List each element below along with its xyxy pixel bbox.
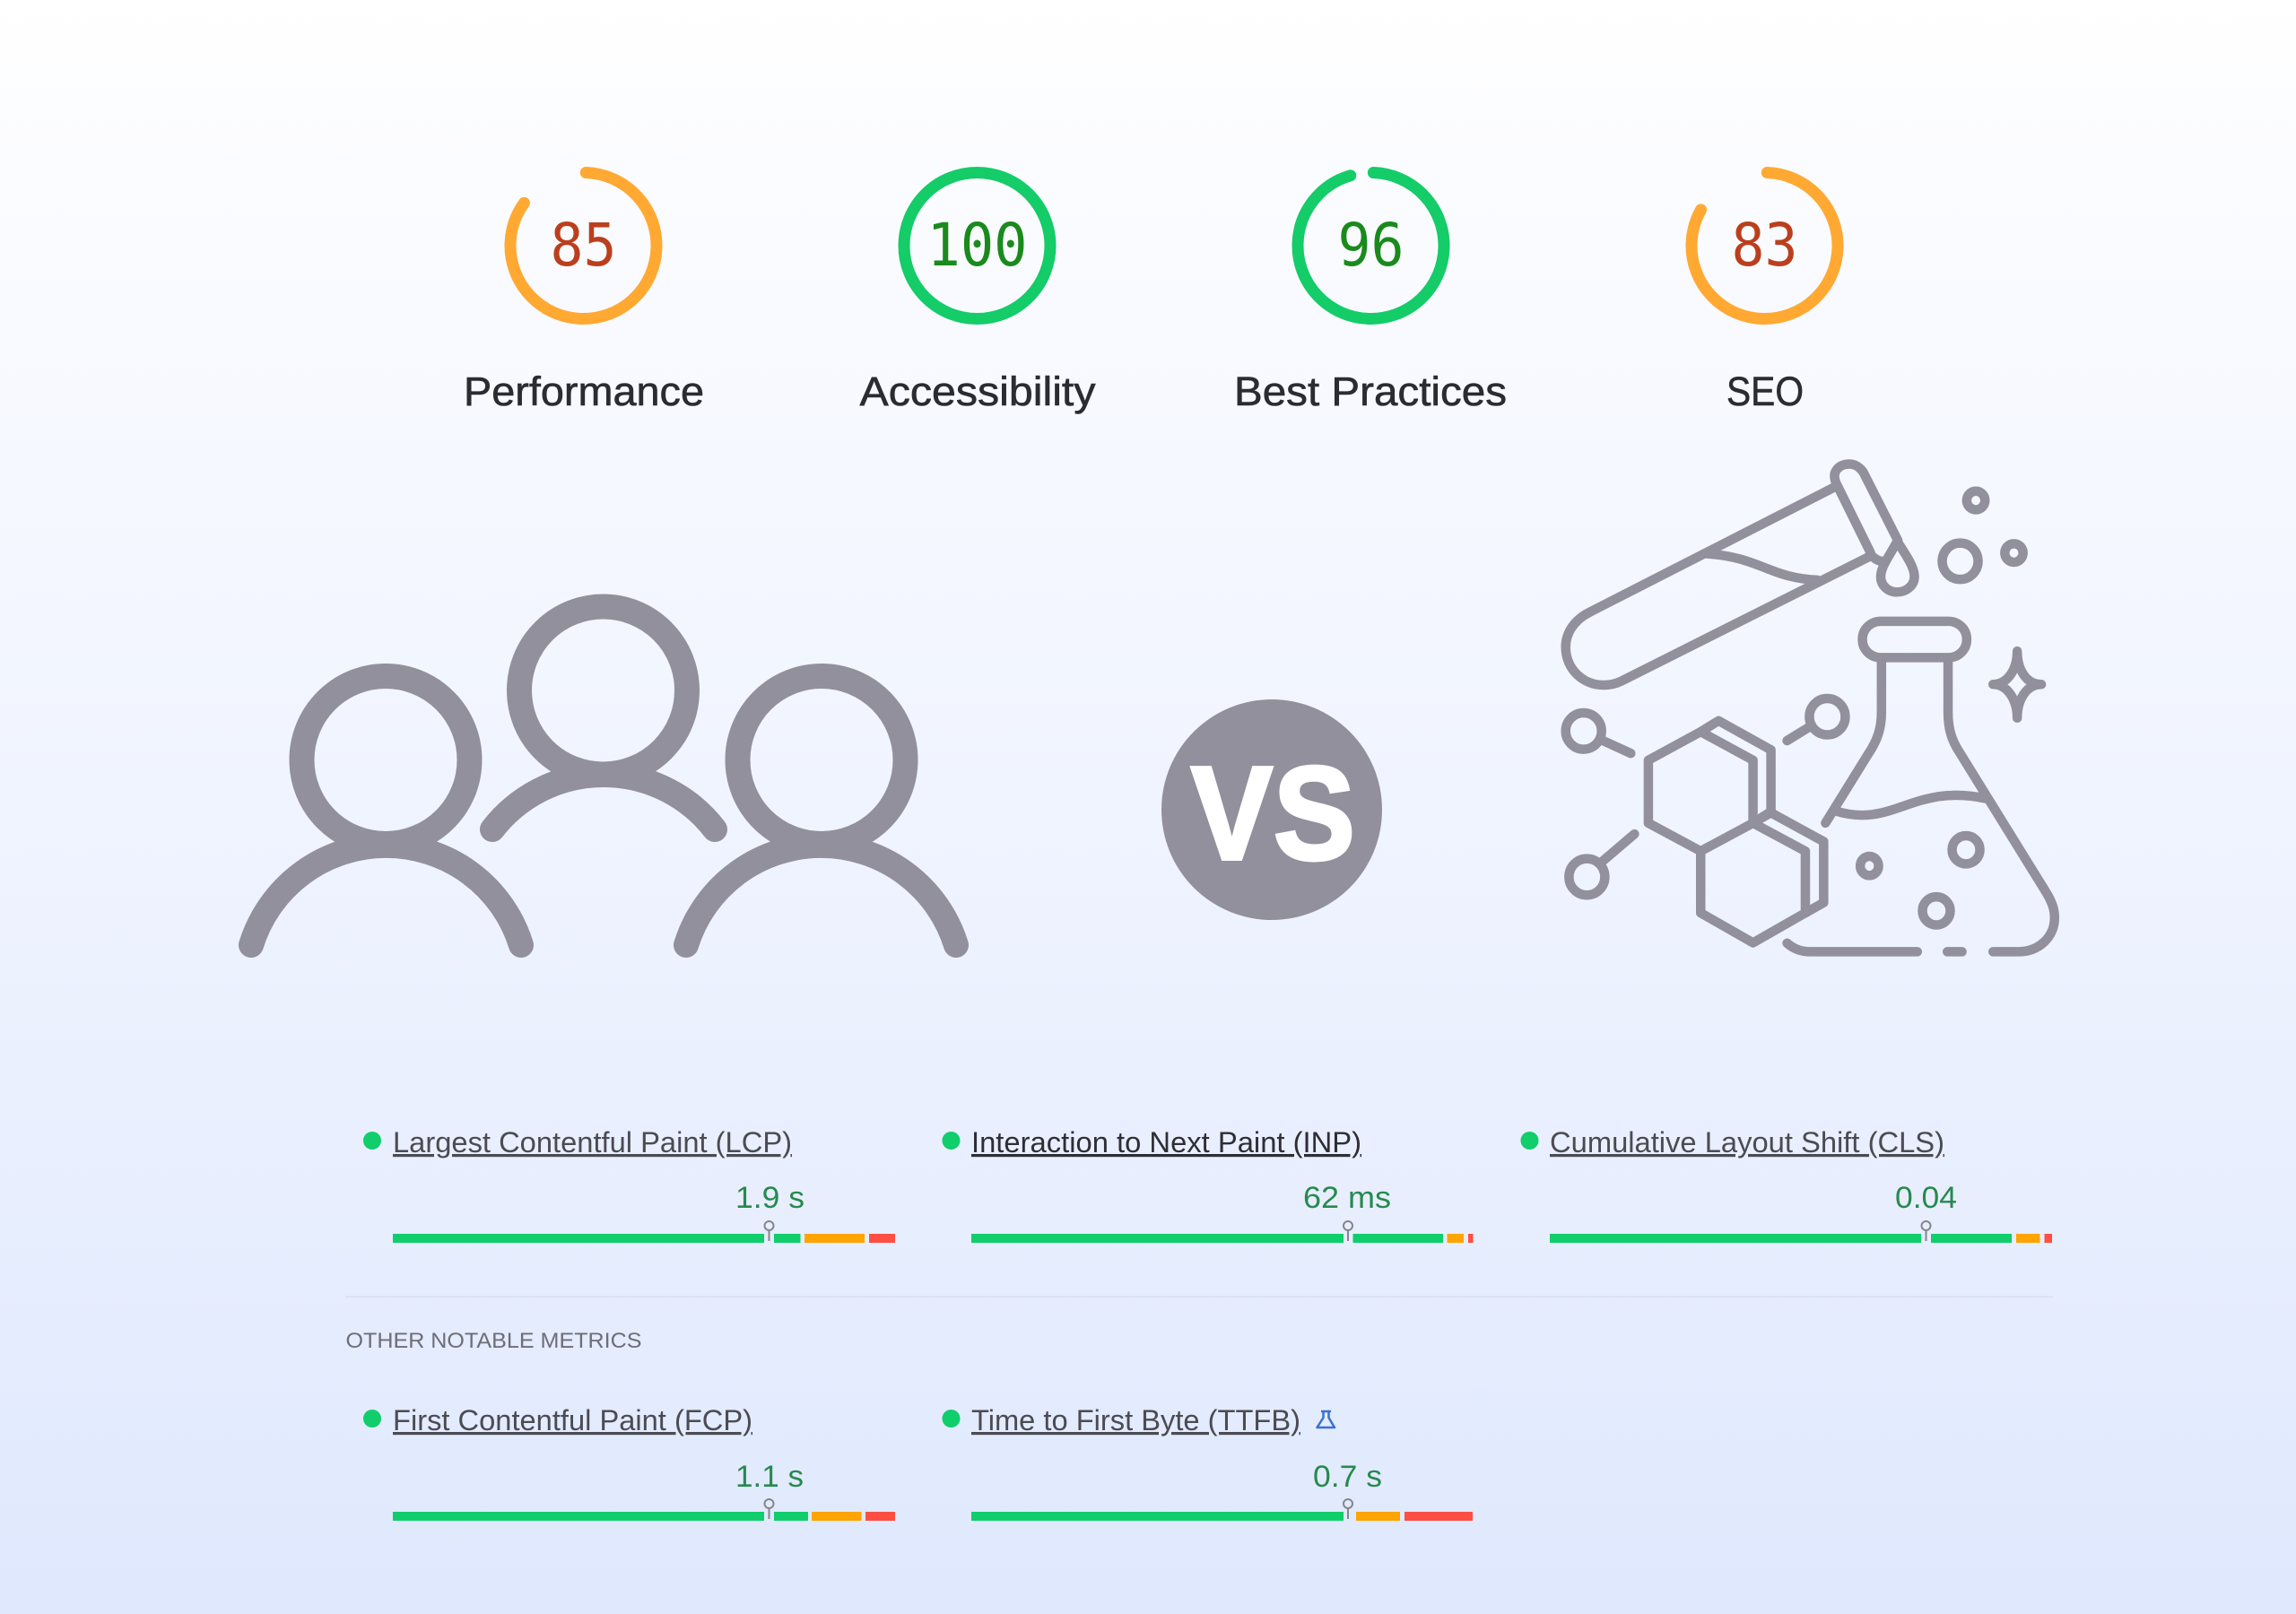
metric: INP: 62 ms <box>1303 1181 1391 1215</box>
panel: lighthouse scores <box>464 170 1840 414</box>
icon: right user <box>686 676 956 945</box>
gauge: seo 83: 83 <box>1731 211 1797 280</box>
gauge: best practices 96 <box>1234 170 1507 414</box>
metric: LCP: 1.9 s <box>735 1181 804 1215</box>
metric: CLS: 0.04 <box>1895 1181 1957 1215</box>
icon: sparkle <box>1993 651 2041 718</box>
metric: CLS <box>1521 1126 2052 1243</box>
metric: LCP: Largest Contentful Paint (LCP) <box>393 1126 792 1158</box>
panel: other notable metrics <box>363 1404 1473 1521</box>
metric: FCP: 1.1 s <box>735 1460 804 1494</box>
gauge: accessibility 100: Accessibility <box>859 369 1096 414</box>
metric: CLS: Cumulative Layout Shift (CLS) <box>1550 1126 1944 1158</box>
metric: INP: Interaction to Next Paint (INP) <box>971 1126 1361 1158</box>
panel: core web vitals <box>363 1126 2052 1243</box>
icon: group of three users <box>251 606 956 945</box>
metric: FCP: First Contentful Paint (FCP) <box>393 1404 752 1436</box>
gauge: seo 83: SEO <box>1726 369 1804 414</box>
gauge: accessibility 100 <box>859 172 1096 414</box>
gauge: performance 85: 85 <box>551 211 617 280</box>
heading: other notable metrics: OTHER NOTABLE METRICS <box>346 1329 642 1353</box>
metric: LCP <box>363 1126 895 1243</box>
gauge: best practices 96: 96 <box>1338 211 1405 280</box>
icon: test tube <box>1566 464 1915 685</box>
icon: flask <box>1787 621 2055 951</box>
metric: INP <box>942 1126 1473 1243</box>
icon: bubbles <box>1943 491 2023 579</box>
gauge: best practices 96: Best Practices <box>1234 369 1507 414</box>
icon: left user <box>251 676 521 945</box>
icon: VS badge <box>1161 699 1382 920</box>
gauge: seo 83 <box>1689 170 1840 414</box>
gauge: performance 85 <box>464 170 704 414</box>
metric: TTFB: Time to First Byte (TTFB) <box>971 1404 1300 1436</box>
icon: middle user <box>492 606 715 829</box>
icon: science lab equipment <box>1566 464 2055 951</box>
icon: VS badge: VS <box>1191 740 1355 888</box>
metric: FCP <box>363 1404 895 1521</box>
metric: TTFB <box>942 1404 1473 1521</box>
icon: molecule <box>1566 699 1845 942</box>
gauge: accessibility 100: 100 <box>927 211 1028 280</box>
gauge: performance 85: Performance <box>464 369 704 414</box>
icon: experimental flask <box>1317 1411 1335 1427</box>
metric: TTFB: 0.7 s <box>1313 1460 1382 1494</box>
